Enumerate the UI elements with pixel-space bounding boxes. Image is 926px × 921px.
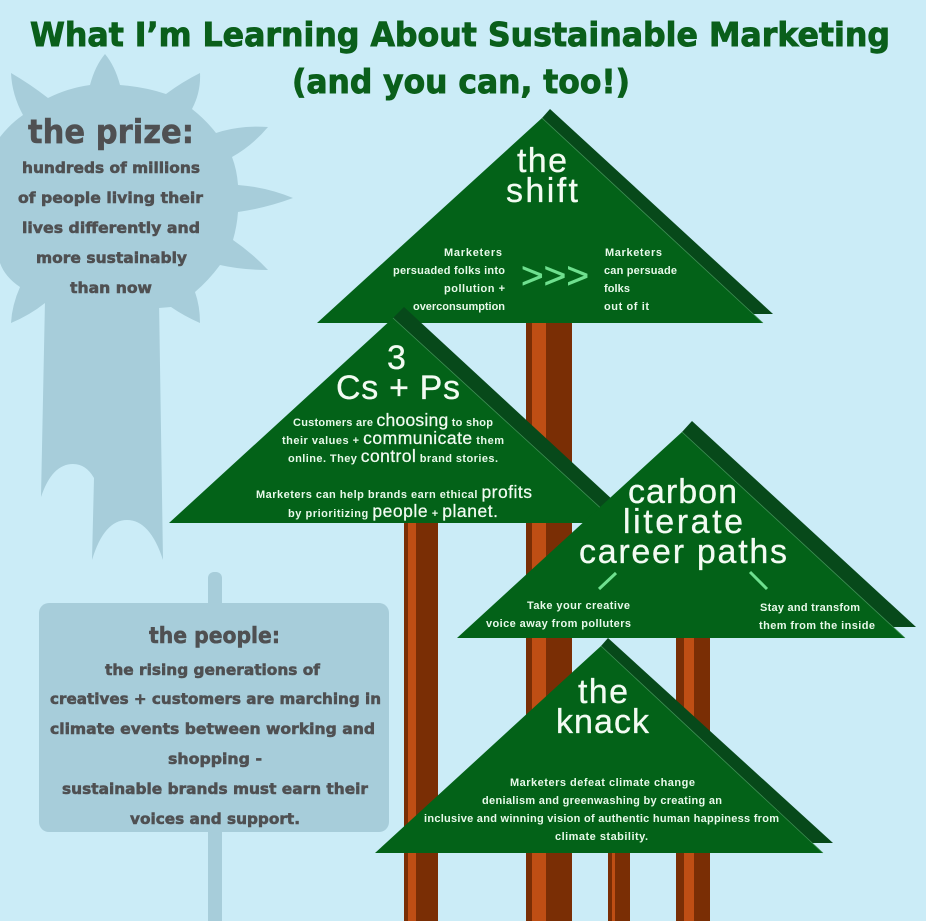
text: knack description: Marketers defeat climate change [510, 777, 695, 789]
icon: sign post [208, 572, 222, 921]
heading: the knack: knack [556, 703, 650, 741]
tree canopy [375, 646, 823, 853]
text: marketers past: persuaded folks into [393, 265, 505, 277]
text: customers paragraph: their values + communicate them [282, 428, 504, 448]
heading: carbon literate career paths [579, 473, 787, 571]
text: stay option: them from the inside [759, 620, 875, 632]
text: knack description: denialism and greenwashing by creating an [482, 795, 722, 807]
tree trunks [404, 320, 710, 921]
tree shadow side [542, 109, 773, 314]
text: prize description: of people living their [18, 189, 204, 207]
panel: the shift tree [317, 109, 773, 323]
text: marketers future: Marketers [605, 247, 662, 259]
sign board [39, 603, 389, 832]
text: prize description: than now [70, 279, 152, 297]
text: marketers future [604, 247, 677, 313]
panel: the prize rosette [0, 54, 293, 560]
heading: the knack: the [578, 673, 628, 711]
icon: right branch tick [750, 572, 767, 589]
text: prize description: hundreds of millions [22, 159, 200, 177]
text: stay option: Stay and transfom [760, 602, 860, 614]
tree shadow side [682, 421, 916, 627]
panel: 3 Cs + Ps tree [169, 307, 627, 523]
text: people description: voices and support. [130, 810, 300, 828]
title: (and you can, too!) [292, 62, 630, 101]
text: people description: sustainable brands must earn their [62, 780, 369, 798]
heading: the prize: the prize: [28, 112, 194, 151]
heading: 3 Cs + Ps: Cs + Ps [336, 369, 460, 407]
heading: the shift: shift [506, 172, 579, 210]
heading: the shift: the [517, 142, 567, 180]
text: leave option: voice away from polluters [486, 618, 631, 630]
text: prize description: more sustainably [36, 249, 187, 267]
tree shadow side [393, 307, 627, 513]
text: knack description: inclusive and winning vision of authentic human happiness from [424, 813, 779, 825]
text: leave option: Take your creative [527, 600, 630, 612]
icon: rosette medal with ribbon [0, 54, 293, 560]
heading: carbon literate career paths: career paths [579, 533, 787, 571]
text: people description: creatives + customers are marching in [50, 690, 381, 708]
tree canopy [169, 318, 617, 523]
text: people description: climate events between working and [50, 720, 375, 738]
heading: the knack [556, 673, 650, 741]
text: people description [50, 661, 381, 828]
text: marketers future: can persuade [604, 265, 677, 277]
tree canopy [457, 432, 905, 638]
text: people description: the rising generations of [105, 661, 320, 679]
panel: carbon literate career paths tree [457, 421, 916, 638]
text: customers paragraph [282, 410, 504, 466]
arrow: >>>: >>> [521, 255, 589, 296]
text: knack description: climate stability. [555, 831, 648, 843]
heading: carbon literate career paths: literate [623, 503, 743, 541]
text: marketers paragraph: Marketers can help brands earn ethical profits [256, 482, 532, 502]
text: marketers paragraph [256, 482, 532, 521]
text: customers paragraph: online. They control brand stories. [288, 446, 498, 466]
heading: carbon literate career paths: carbon [628, 473, 737, 511]
text: stay option [759, 602, 875, 632]
tree shadow side [601, 638, 833, 843]
icon: left branch tick [599, 573, 616, 589]
text: marketers paragraph: by prioritizing people + planet. [288, 501, 498, 521]
text: marketers past: Marketers [444, 247, 502, 259]
heading: the people: the people: [149, 624, 280, 649]
panel: the knack tree [375, 638, 833, 853]
text: marketers past: overconsumption [413, 301, 505, 313]
title: What I’m Learning About Sustainable Marketing [30, 15, 890, 54]
text: marketers past [393, 247, 505, 313]
heading: 3 Cs + Ps: 3 [387, 339, 406, 377]
text: prize description [18, 159, 204, 297]
panel: the people sign [39, 572, 389, 921]
text: prize description: lives differently and [22, 219, 200, 237]
text: marketers past: pollution + [444, 283, 505, 295]
tree canopy [317, 118, 763, 323]
heading: the shift [506, 142, 579, 210]
text: marketers future: out of it [604, 301, 649, 313]
text: customers paragraph: Customers are choosing to shop [293, 410, 493, 430]
text: knack description [424, 777, 779, 843]
text: people description: shopping - [168, 750, 262, 768]
text: marketers future: folks [604, 283, 630, 295]
heading: 3 Cs + Ps [336, 339, 460, 407]
title [30, 15, 890, 101]
text: leave option [486, 600, 631, 630]
